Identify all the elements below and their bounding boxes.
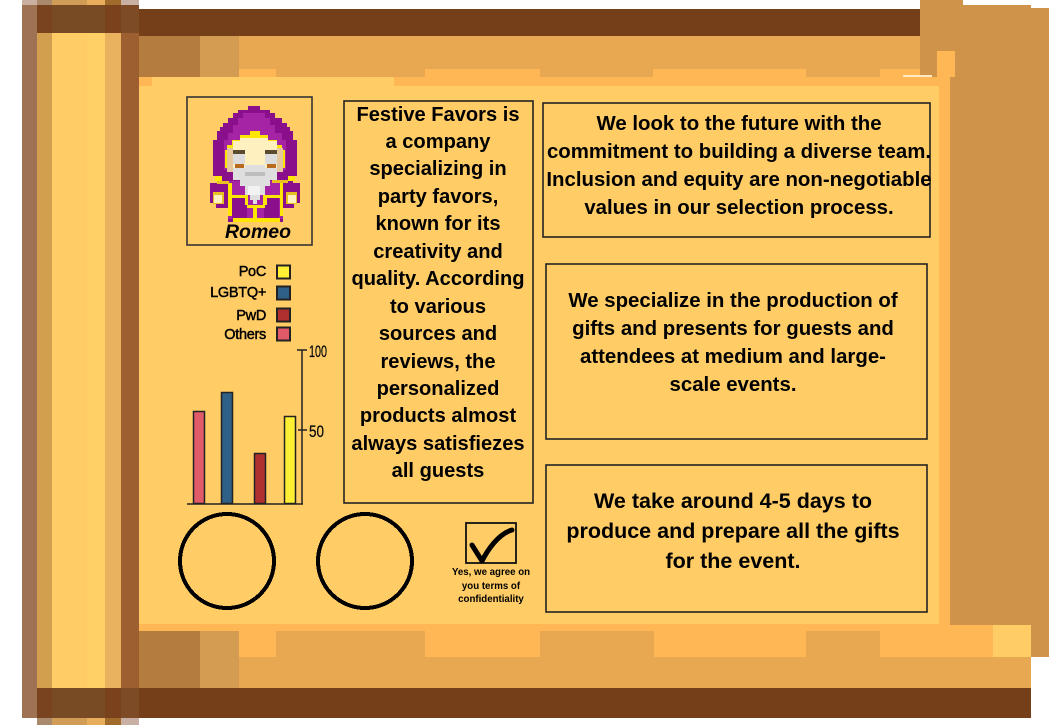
panel: company description <box>344 101 533 503</box>
bar chart <box>187 342 327 504</box>
panel: company description: products almost <box>360 405 516 427</box>
panel: commitment: Inclusion and equity are non-negotiable <box>546 169 932 191</box>
panel: specialization: scale events. <box>670 374 796 396</box>
panel: company description: reviews, the <box>380 351 496 373</box>
checkbox with check mark <box>466 523 516 563</box>
panel: commitment: values in our selection process. <box>584 197 894 219</box>
confidentiality agreement text: confidentiality <box>458 594 524 605</box>
panel: production time: for the event. <box>666 549 800 573</box>
panel: company description: sources and <box>379 323 497 345</box>
panel: production time: produce and prepare all the gifts <box>566 519 900 543</box>
bar chart: 100 <box>309 342 327 361</box>
legend: Others <box>224 327 266 343</box>
panel: company description: personalized <box>377 378 499 400</box>
name: Romeo: Romeo <box>225 221 291 243</box>
panel: commitment: commitment to building a diverse team. <box>547 141 931 163</box>
panel: company description: a company <box>386 131 491 153</box>
confidentiality agreement text <box>452 567 530 605</box>
confidentiality agreement text: you terms of <box>462 581 521 592</box>
panel: portrait <box>187 97 312 245</box>
confidentiality agreement text: Yes, we agree on <box>452 567 530 578</box>
signature circle 2 <box>318 514 412 608</box>
panel: company description: party favors, <box>378 186 498 208</box>
bar chart: 50 <box>309 422 324 441</box>
legend <box>210 264 290 343</box>
panel: specialization: We specialize in the production of <box>568 290 898 312</box>
panel: specialization <box>546 264 927 439</box>
panel: company description: Festive Favors is <box>356 104 520 126</box>
panel: company description: specializing in <box>369 158 507 180</box>
panel: company description: creativity and <box>373 241 503 263</box>
panel: specialization: gifts and presents for guests and <box>572 318 894 340</box>
scroll left roller <box>22 0 139 725</box>
panel: commitment: We look to the future with the <box>596 113 882 135</box>
legend: PoC <box>239 264 266 280</box>
icon: wizard Romeo <box>210 106 300 222</box>
panel: company description: known for its <box>375 213 501 235</box>
panel: production time <box>546 465 927 612</box>
signature circle 1 <box>180 514 274 608</box>
panel: production time: We take around 4-5 days to <box>594 489 872 513</box>
panel: company description: to various <box>390 296 486 318</box>
panel: company description: all guests <box>392 460 484 482</box>
panel: specialization: attendees at medium and large- <box>580 346 886 368</box>
legend: PwD <box>236 308 266 324</box>
panel: commitment <box>543 103 932 237</box>
panel: company description: always satisfiezes <box>351 433 525 455</box>
panel: company description: quality. According <box>351 268 525 290</box>
legend: LGBTQ+ <box>210 285 266 301</box>
